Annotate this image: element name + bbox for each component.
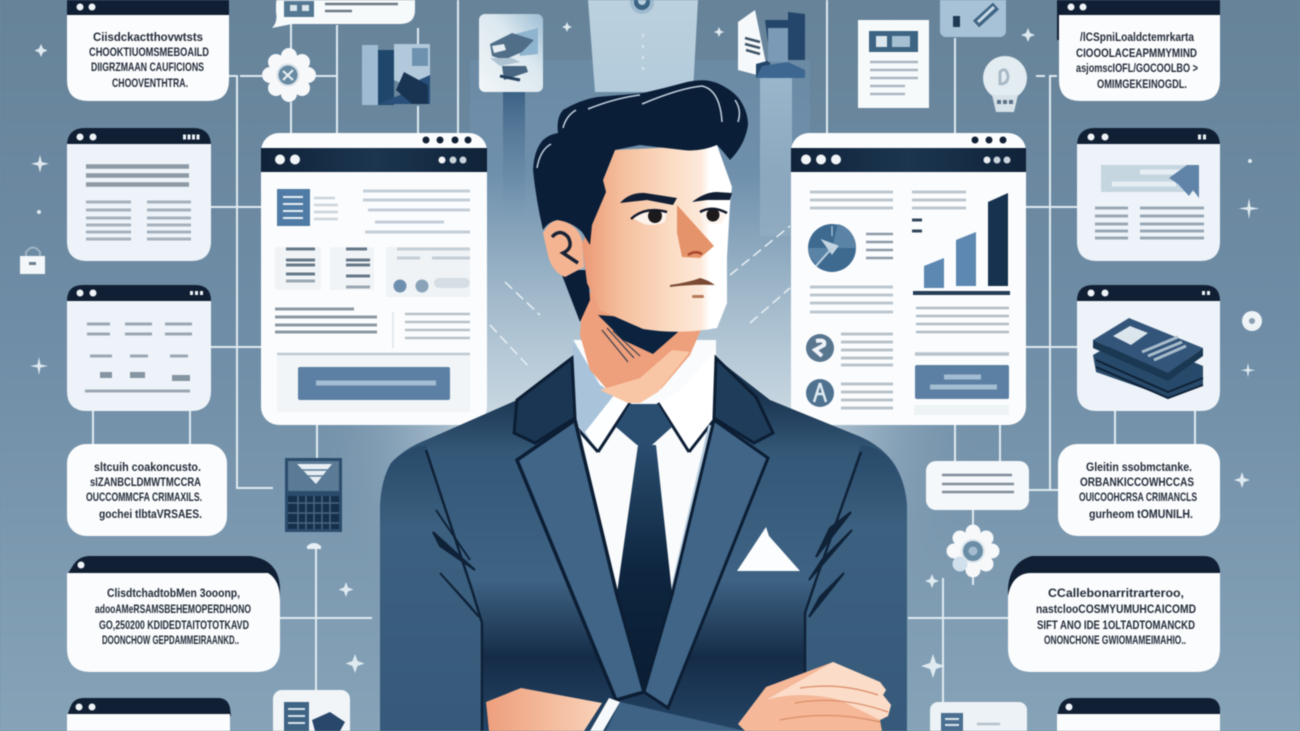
icon: small connector node [307,543,321,549]
panel: left wide text card: ClisdtchadtobMen 3ooonp, [107,588,240,600]
panel: left wide text card [67,556,280,672]
panel: left top text card: CHOOKTIUOMSMEBOAILD [89,47,209,59]
button [915,365,1009,399]
icon: folded box right [738,10,805,78]
panel: left card with text lines [67,128,211,261]
pocket square [737,527,800,571]
icon: bubble right [926,461,1029,510]
icon: round badge top [806,334,834,362]
panel: left top text card: Ciisdckactthovwtsts [93,32,203,44]
panel: left top text card: DIIGRZMAAN CAUFICIONS [91,62,204,74]
panel: left wide text card: adooAMeRSAMSBEHEMOPERDHONO [95,604,251,616]
panel: left wide text card: GO,250200 KDIDEDTAITOTOTKAVD [99,620,249,632]
icon: calculator panel [285,458,342,532]
icon: speech bubble top [272,0,415,28]
panel: left text card no header: sIZANBCLDMWTMCCRA [90,477,201,489]
panel: right text card no header [1058,444,1220,536]
icon: light bulb [983,56,1027,112]
panel: right top text card: CIOOOLACEAPMMYMIND [1076,48,1197,60]
icon: top center badge [630,0,654,14]
neck [580,290,703,403]
man figure [380,80,907,731]
icon: document thumbnail [277,189,310,226]
panel: left wide text card: DOONCHOW GEPDAMMEIRAANKD.. [102,635,239,647]
panel: left dashboard window [261,133,487,425]
panel: right wide text card: nastclooCOSMYUMUHCAICOMD [1036,604,1196,616]
panel: left bottom card [67,698,231,731]
nose [677,205,714,258]
icon: card with shapes [479,14,543,92]
icon: document sheet [858,20,929,108]
icon: round badge bottom [806,379,834,407]
panel: right text card no header: gurheom tOMUNILH. [1089,509,1193,521]
icon: bottom right doc card [930,702,1027,731]
button [298,367,450,400]
panel: right top text card [1057,0,1220,101]
panel: left top text card: CHOOVENTHTRA. [112,78,188,90]
icon: small tag card [940,0,1006,37]
right eye [700,208,727,224]
panel: left text card no header: OUCCOMMCFA CRIMAXILS. [86,492,202,504]
icon: padlock [20,248,45,274]
panel: right wide text card: CCallebonarritrarteroo, [1048,588,1184,600]
panel: right card with arrow banner [1077,128,1220,261]
body: suit jacket [380,358,907,731]
arms: forearm and hand [486,662,891,731]
panel: right dashboard window [791,133,1026,425]
panel: right wide text card: ONONCHONE GWIOMAMEIMAHIO.. [1044,635,1186,647]
panel: right wide text card: SIFT ANO IDE 1OLTADTOMANCKD [1037,620,1195,632]
panel: left text card no header: gochei tlbtaVRSAES. [99,509,202,521]
lapels [514,358,773,708]
panel: right top text card: OMIMGEKEINOGDL. [1097,79,1187,91]
panel: right top text card: /lCSpniLoaldctemrkarta [1080,32,1195,44]
eyebrows [620,192,732,205]
chart: pie [808,224,856,272]
panel: left card with small table [67,285,211,411]
panel: right wide text card [1008,556,1220,672]
panel: left top text card [67,0,229,101]
panel: left text card no header [67,444,227,536]
left eye [631,209,667,225]
head: hair back [560,270,590,322]
ear [543,220,584,277]
icon: gear left [262,48,316,102]
panel: right text card no header: Gleitin ssobmctanke. [1086,462,1192,474]
panel: left text card no header: sltcuih coakoncusto. [94,462,201,474]
panel: right top text card: asjomscIOFL/GOCOOLBO > [1076,63,1198,75]
icon: gear right [946,524,1000,578]
head: hair [533,80,748,245]
icon: stack of cards [1093,318,1203,398]
icon: ring badge [1242,311,1262,331]
head: face [543,145,732,332]
chart: bar chart [913,193,1010,295]
panel: right text card no header: OUICOOHCRSA CRIMANCLS [1079,492,1197,504]
mouth [670,278,715,298]
panel: right bottom card [1057,698,1220,731]
tie [616,404,672,690]
panel: right text card no header: ORBANKICCOWHCCAS [1080,477,1194,489]
panel: right card with stacked cards icon [1077,285,1220,411]
icon: open box [362,44,430,105]
shirt [572,338,716,690]
icon: bottom left folder [273,690,350,731]
